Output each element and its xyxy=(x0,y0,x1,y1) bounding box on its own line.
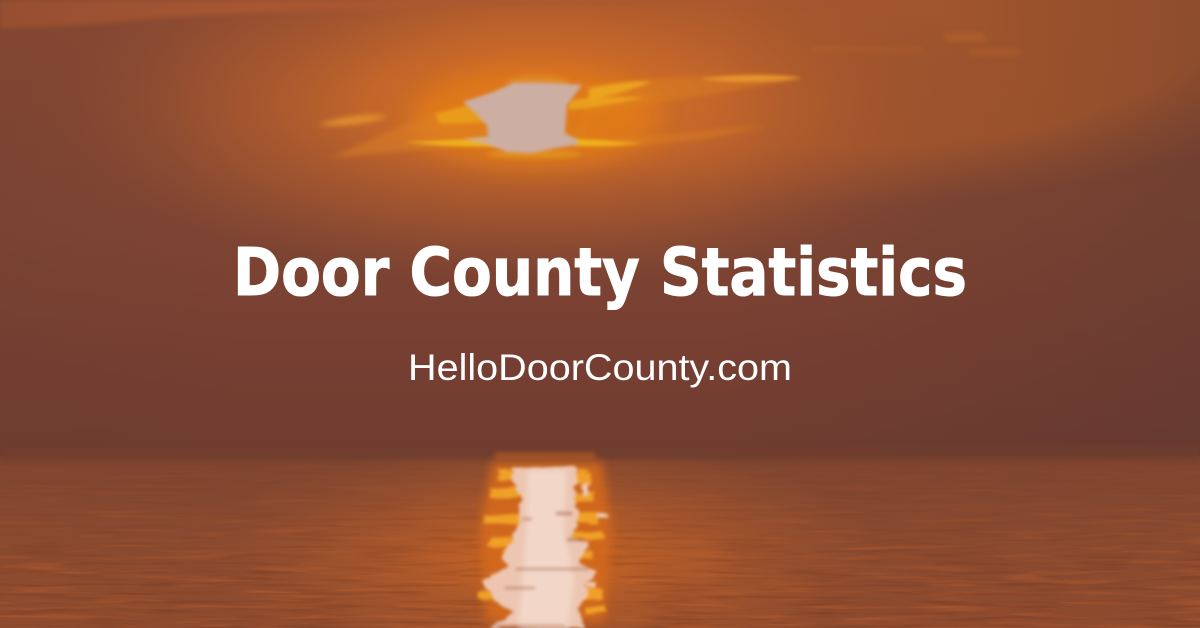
horizon haze xyxy=(2,449,1198,461)
sun disc xyxy=(463,83,582,153)
reflection highlight xyxy=(518,470,574,628)
sun reflection on water xyxy=(478,453,612,628)
dark ripples across core xyxy=(495,512,588,627)
reflection sparkles xyxy=(478,468,608,612)
lake water xyxy=(0,456,1200,628)
sun and cloud streaks xyxy=(318,70,802,166)
website subtitle: HelloDoorCounty.com xyxy=(408,347,792,388)
title: Door County Statistics xyxy=(233,234,967,311)
wave ripples xyxy=(0,500,1200,628)
reflection bright core xyxy=(484,465,598,628)
cloud streaks xyxy=(318,75,802,158)
sky background xyxy=(0,0,1200,396)
faint high clouds xyxy=(946,34,1017,54)
